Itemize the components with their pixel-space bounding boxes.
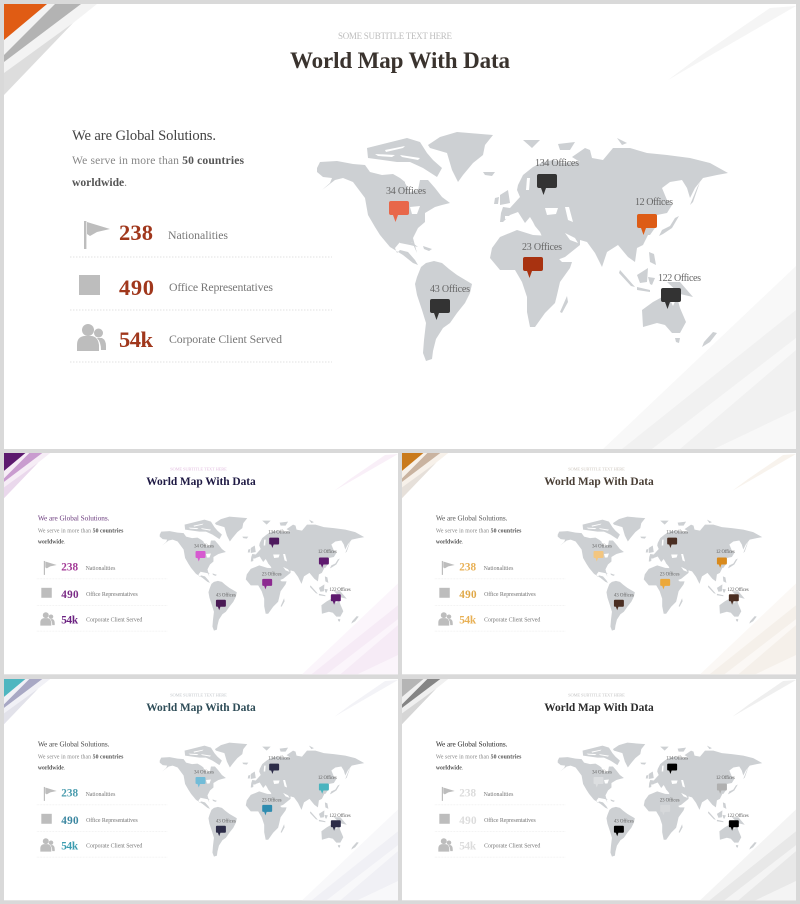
stat: nationalities: 238 [459,787,477,799]
panel: orange main slide [4,4,796,449]
stat: corporate clients: Corporate Client Served [484,844,540,850]
text block: intro: worldwide. [38,540,66,546]
marker: 122 offices [727,814,749,831]
text block: intro: worldwide. [436,540,464,546]
stat: office representatives [439,588,537,601]
marker: 122 offices: 122 Offices [727,588,749,593]
marker: 12 offices: 12 Offices [318,550,337,555]
marker: 23 offices [660,798,680,815]
marker: 43 offices: 43 Offices [614,819,634,824]
marker: 23 offices [262,798,282,815]
text block: intro: We serve in more than 50 countries [436,529,522,535]
marker: 12 offices [318,550,337,568]
world map with office markers [558,743,762,857]
text block: intro [38,515,124,546]
stat: nationalities: 238 [119,220,153,245]
marker: 12 offices: 12 Offices [716,550,735,555]
stat: nationalities: 238 [61,561,79,573]
marker: 23 offices: 23 Offices [262,572,282,577]
marker: 34 offices [592,771,612,787]
marker: 34 offices [592,545,612,561]
marker: 122 offices [329,588,351,605]
stat: office representatives [41,588,138,598]
panel: teal variant [4,679,398,900]
marker: 122 offices: 122 Offices [658,273,701,284]
stat: office representatives [439,814,537,827]
marker: 134 offices: 134 Offices [268,531,290,536]
stat: office representatives: Office Representatives [484,817,537,824]
text block: intro: We serve in more than 50 countries [38,529,124,535]
marker: 43 offices [430,284,470,320]
corner decoration: top left [4,4,97,95]
world map with office markers [160,517,364,631]
stat: nationalities: 238 [61,787,79,799]
stat: nationalities: Nationalities [86,566,116,572]
stat: corporate clients: 54k [459,841,477,853]
stat: office representatives [41,814,139,827]
text block: intro: We are Global Solutions. [38,515,110,523]
marker: 134 offices [268,757,290,774]
corner decoration: bottom right [700,809,796,900]
marker: 122 offices: 122 Offices [727,814,749,819]
marker: 34 offices [386,186,426,222]
marker: 34 offices [194,545,214,561]
marker: 134 offices [268,531,290,548]
marker: 43 offices [614,593,634,610]
corner decoration: top right [732,454,796,491]
corner decoration: top right [334,454,398,491]
marker: 134 offices [666,531,688,548]
stat: office representatives: 490 [61,589,79,601]
marker: 134 offices: 134 Offices [535,158,579,169]
title: World Map With Data [544,702,654,714]
subtitle: SOME SUBTITLE TEXT HERE [568,466,625,471]
text block: intro [72,128,244,189]
stat: nationalities [442,787,514,801]
stat: corporate clients [438,612,540,627]
marker: 34 offices: 34 Offices [194,545,214,550]
panel: amber variant [402,453,796,674]
marker: 122 offices [329,814,351,831]
corner decoration: bottom right [302,809,398,900]
subtitle: SOME SUBTITLE TEXT HERE [170,466,227,471]
text block: intro: We are Global Solutions. [72,128,216,144]
stat: office representatives: Office Representatives [86,591,139,598]
title: World Map With Data [290,48,510,73]
stat: office representatives: Office Representatives [86,817,139,824]
marker: 23 offices [522,242,562,278]
stat: corporate clients [77,324,282,352]
marker: 12 offices [635,197,673,235]
marker: 23 offices [262,572,282,589]
marker: 43 offices: 43 Offices [216,819,236,824]
subtitle: SOME SUBTITLE TEXT HERE [338,31,452,41]
text block: intro: We serve in more than 50 countries [72,154,244,167]
marker: 12 offices [318,776,337,794]
text block: intro: worldwide. [436,766,464,772]
marker: 23 offices: 23 Offices [262,798,282,803]
stat: office representatives: Office Representatives [169,280,273,294]
stat: nationalities: Nationalities [484,792,514,798]
stat: corporate clients [40,838,142,853]
stat: corporate clients [40,612,142,627]
corner decoration: top left [4,453,50,498]
marker: 134 offices [535,158,579,195]
stat: nationalities: Nationalities [168,228,228,242]
world map with office markers [317,132,728,361]
stat: office representatives: 490 [459,815,477,827]
corner decoration: top right [334,680,398,717]
text block: intro: worldwide. [72,176,127,189]
marker: 43 offices: 43 Offices [614,593,634,598]
marker: 12 offices: 12 Offices [318,776,337,781]
corner decoration: top right [668,6,796,80]
marker: 122 offices [727,588,749,605]
marker: 23 offices [660,572,680,589]
stat: corporate clients: Corporate Client Served [169,332,282,346]
panel: greyscale variant [402,679,796,900]
world map with office markers [558,517,762,631]
marker: 43 offices [216,593,236,610]
text block: intro: We are Global Solutions. [436,741,508,749]
stat: corporate clients: 54k [459,615,477,627]
text block: intro [436,741,522,772]
text block: intro: We serve in more than 50 countries [38,755,124,761]
marker: 34 offices: 34 Offices [592,771,612,776]
marker: 134 offices: 134 Offices [268,757,290,762]
stat: corporate clients: Corporate Client Served [86,844,142,850]
marker: 43 offices [216,819,236,836]
marker: 23 offices: 23 Offices [660,798,680,803]
text block: intro: We are Global Solutions. [38,741,110,749]
stat: office representatives: Office Representatives [484,591,537,598]
stat: corporate clients: 54k [119,327,153,352]
marker: 34 offices: 34 Offices [386,186,426,197]
stat: office representatives: 490 [459,589,477,601]
marker: 12 offices: 12 Offices [635,197,673,208]
corner decoration: top right [732,680,796,717]
corner decoration: bottom right [622,310,796,449]
marker: 122 offices: 122 Offices [329,814,351,819]
marker: 43 offices: 43 Offices [430,284,470,295]
stat: corporate clients [438,838,540,853]
marker: 134 offices: 134 Offices [666,757,688,762]
marker: 34 offices [194,771,214,787]
stat: corporate clients: 54k [61,841,79,853]
text block: intro [436,515,522,546]
stat: nationalities [442,561,514,575]
stat: office representatives: 490 [119,275,154,300]
corner decoration: bottom right [302,583,398,674]
corner decoration: bottom right [700,583,796,674]
stat: nationalities: Nationalities [86,792,116,798]
stat: nationalities [44,787,116,801]
text block: intro: We are Global Solutions. [436,515,508,523]
corner decoration: top left [4,679,50,724]
marker: 12 offices [716,776,735,794]
subtitle: SOME SUBTITLE TEXT HERE [568,692,625,697]
marker: 34 offices: 34 Offices [592,545,612,550]
stat: corporate clients: Corporate Client Served [86,618,142,624]
marker: 122 offices: 122 Offices [329,588,351,593]
marker: 23 offices: 23 Offices [522,242,562,253]
corner decoration: top left [402,679,448,724]
subtitle: SOME SUBTITLE TEXT HERE [170,692,227,697]
title: World Map With Data [146,702,256,714]
text block: intro: We serve in more than 50 countries [436,755,522,761]
panel: purple variant [4,453,398,674]
text block: intro [38,741,124,772]
text block: intro: worldwide. [38,766,66,772]
world map with office markers [160,743,364,857]
marker: 43 offices [614,819,634,836]
title: World Map With Data [146,476,256,488]
marker: 134 offices [666,757,688,774]
stat: nationalities: 238 [459,561,477,573]
stat: corporate clients: Corporate Client Served [484,618,540,624]
stat: nationalities [84,220,228,249]
marker: 12 offices: 12 Offices [716,776,735,781]
title: World Map With Data [544,476,654,488]
marker: 23 offices: 23 Offices [660,572,680,577]
stat: office representatives: 490 [61,815,79,827]
stat: nationalities: Nationalities [484,566,514,572]
marker: 43 offices: 43 Offices [216,593,236,598]
marker: 122 offices [658,273,701,309]
stat: corporate clients: 54k [61,615,79,627]
marker: 134 offices: 134 Offices [666,531,688,536]
stat: office representatives [79,275,272,295]
corner decoration: top left [402,453,448,498]
marker: 34 offices: 34 Offices [194,771,214,776]
stat: nationalities [44,561,116,575]
marker: 12 offices [716,550,735,568]
